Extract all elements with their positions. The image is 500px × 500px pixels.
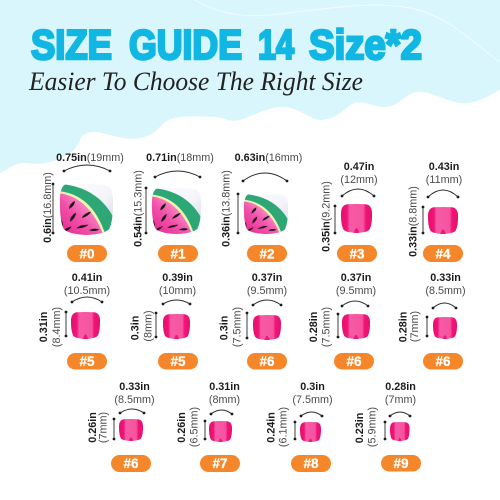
width label #2: 0.63in(16mm) <box>235 152 302 164</box>
height label #6 c: (7mm) <box>409 311 421 342</box>
height label #8: 0.24in <box>266 412 278 443</box>
width label #3 <box>340 161 378 186</box>
badge #4: #4 <box>435 246 451 262</box>
width label #4: 0.43in <box>429 161 459 173</box>
height label #5: (8.4mm) <box>51 307 63 347</box>
height line #4 <box>422 206 424 234</box>
width label #7 <box>209 381 240 406</box>
width arc #5 second <box>162 300 191 305</box>
height label #9: (5.9mm) <box>366 407 378 447</box>
width arc #8 <box>300 412 323 417</box>
height line #5 <box>65 311 67 337</box>
height label #4: 0.33in(8.8mm) <box>408 186 420 257</box>
height label #1: 0.54in(15.3mm) <box>132 170 144 247</box>
height label #5 <box>38 307 63 347</box>
subtitle: Easier To Choose The Right Size <box>28 67 363 96</box>
badge #8: #8 <box>303 456 319 471</box>
width label #1: 0.71in(18mm) <box>146 152 214 164</box>
size #4 <box>408 161 463 262</box>
width arc #4 <box>427 190 459 198</box>
width arc #2 <box>242 173 288 182</box>
height line #6 d <box>113 418 115 440</box>
nail #9 <box>390 422 410 441</box>
width label #4 <box>426 161 462 186</box>
height label #8 <box>266 407 290 447</box>
nail #5 second <box>163 314 190 339</box>
size #9 <box>354 381 421 472</box>
badge #0: #0 <box>79 246 95 262</box>
width arc #6 a <box>252 300 282 306</box>
height label #6 b: (7.5mm) <box>320 307 332 347</box>
badge #5 second: #5 <box>170 354 186 369</box>
height line #2 <box>237 193 239 234</box>
height line #5 second <box>155 312 157 338</box>
height label #5 second: (8mm) <box>142 310 154 342</box>
nail #2 <box>243 193 289 236</box>
nail #7 <box>209 421 232 442</box>
height line #0 <box>52 183 54 234</box>
width label #6 b: (9.5mm) <box>336 285 376 297</box>
height line #6 b <box>337 313 339 338</box>
nail #8 <box>300 422 321 442</box>
size #5 (second) <box>130 272 198 370</box>
size #6 (third) <box>398 272 466 370</box>
background: light blue wave <box>0 0 500 173</box>
width label #3: (12mm) <box>340 174 378 186</box>
title <box>31 21 422 68</box>
height line #3 <box>334 205 336 234</box>
width label #6 b: 0.37in <box>341 272 371 284</box>
height label #6 c: 0.28in <box>398 312 410 342</box>
width arc #6 d <box>119 409 145 414</box>
width label #6 c: (8.5mm) <box>425 285 466 297</box>
width arc #5 <box>71 297 103 303</box>
height label #3: 0.35in(9.2mm) <box>320 181 332 252</box>
width label #9: (7mm) <box>385 394 416 406</box>
width label #5: (10.5mm) <box>64 285 110 297</box>
height label #7 <box>176 407 200 447</box>
width label #4: (11mm) <box>426 174 462 186</box>
height label #6 a: (7.5mm) <box>232 307 244 347</box>
width arc #9 <box>389 412 411 417</box>
height label #9 <box>354 407 378 447</box>
width arc #3 <box>341 189 375 197</box>
height label #6 d: 0.26in <box>87 412 99 443</box>
width label #5 second: 0.39in <box>162 272 193 284</box>
badge #3: #3 <box>349 246 365 262</box>
width label #6 d <box>114 381 155 406</box>
badge #5: #5 <box>79 354 95 369</box>
height label #7: (6.5mm) <box>188 407 200 447</box>
badge #9: #9 <box>393 456 409 471</box>
height label #5 second <box>130 310 154 342</box>
width label #0: 0.75in(19mm) <box>56 152 124 164</box>
size #2 <box>220 152 302 262</box>
height label #6 a: 0.3in <box>218 316 230 340</box>
nail #6 d <box>119 419 143 441</box>
width label #9: 0.28in <box>385 381 416 393</box>
nail #6 a <box>253 315 281 340</box>
width label #7: 0.31in <box>209 381 240 393</box>
height line #6 c <box>426 316 428 337</box>
width label #8: 0.3in <box>300 381 325 393</box>
title: SIZE <box>31 21 112 68</box>
width label #6 a: (9.5mm) <box>247 285 287 297</box>
width label #9 <box>385 381 416 406</box>
width label #6 b <box>336 272 376 297</box>
width arc #1 <box>154 171 201 178</box>
height line #1 <box>145 187 147 234</box>
width arc #7 <box>210 410 233 415</box>
title: GUIDE <box>129 21 242 68</box>
nail #6 b <box>342 314 370 339</box>
height label #6 d: (7mm) <box>98 412 110 443</box>
height label #5: 0.31in <box>38 312 50 342</box>
height line #8 <box>294 421 296 440</box>
size #6 (first) <box>218 272 287 370</box>
width label #5: 0.41in <box>72 272 102 284</box>
height label #6 b <box>308 307 332 347</box>
size #5 (first) <box>38 272 110 370</box>
height label #6 c <box>398 311 421 342</box>
badge #1: #1 <box>170 246 186 262</box>
height line #6 a <box>246 312 248 339</box>
height label #0: 0.6in(16.8mm) <box>42 172 54 243</box>
height label #7: 0.26in <box>176 412 188 443</box>
width label #5 second <box>159 272 196 297</box>
badge #7: #7 <box>212 456 228 471</box>
height line #9 <box>384 421 386 440</box>
width label #6 d: (8.5mm) <box>114 394 155 406</box>
nail #4 <box>428 207 458 234</box>
badge #6 b: #6 <box>346 354 362 369</box>
nail #5 <box>71 312 100 339</box>
decorative line <box>195 0 500 62</box>
width label #8 <box>292 381 333 406</box>
height label #2: 0.36in(13.8mm) <box>220 170 232 247</box>
title: 14 <box>258 21 294 68</box>
badge #2: #2 <box>259 246 275 262</box>
height label #6 a <box>218 307 244 347</box>
width label #6 a <box>247 272 287 297</box>
nail #0 <box>59 183 114 237</box>
width label #6 c: 0.33in <box>430 272 461 284</box>
height label #5 second: 0.3in <box>130 316 142 340</box>
width label #5 <box>64 272 110 297</box>
size #3 <box>320 161 378 262</box>
size #7 <box>176 381 240 472</box>
width arc #6 c <box>432 303 457 309</box>
badge #6 d: #6 <box>123 456 139 471</box>
size #8 <box>266 381 333 472</box>
badge #6 a: #6 <box>259 354 275 369</box>
height label #6 b: 0.28in <box>308 312 320 342</box>
width arc #6 b <box>341 301 369 307</box>
title: Size*2 <box>309 21 422 68</box>
width label #6 a: 0.37in <box>252 272 282 284</box>
width label #6 d: 0.33in <box>119 381 150 393</box>
nail #1 <box>151 187 202 236</box>
width label #7: (8mm) <box>209 394 240 406</box>
height label #9: 0.23in <box>354 413 366 443</box>
nail #6 c <box>433 317 457 339</box>
height line #7 <box>204 420 206 440</box>
size #0 <box>42 152 124 262</box>
width label #8: (7.5mm) <box>292 394 333 406</box>
height label #6 d <box>87 412 110 443</box>
size #6 (fourth) <box>87 381 155 472</box>
width label #6 c <box>425 272 466 297</box>
nail #3 <box>341 204 372 233</box>
width arc #0 <box>63 165 111 172</box>
width label #5 second: (10mm) <box>159 285 196 297</box>
height label #8: (6.1mm) <box>278 407 290 447</box>
width label #3: 0.47in <box>344 161 374 173</box>
size #6 (second) <box>308 272 376 370</box>
badge #6 c: #6 <box>435 354 451 369</box>
size #1 <box>132 152 214 262</box>
